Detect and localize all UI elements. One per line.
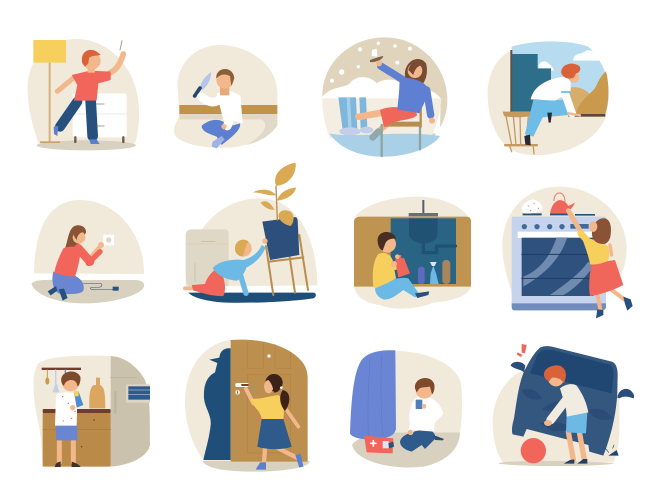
- scene: boy with ball under car: [493, 344, 634, 466]
- scene: boy holding knife: [174, 45, 277, 148]
- scene: boy climbing to window: [488, 41, 609, 155]
- scene: girl on chair by overflowing bath: [322, 37, 447, 157]
- scene: boy with jar in kitchen: [33, 356, 150, 467]
- scene: boy with phone and first aid kit: [350, 350, 462, 467]
- scene: boy with match by lamp: [28, 39, 139, 150]
- scene: girl at wall socket: [31, 200, 144, 303]
- scene: girl at stove with kettle: [502, 187, 633, 318]
- scene: girl at door with stranger: [185, 340, 309, 472]
- scene: child with bottles under sink: [354, 197, 471, 309]
- scene: child pulling plant stand: [185, 163, 317, 303]
